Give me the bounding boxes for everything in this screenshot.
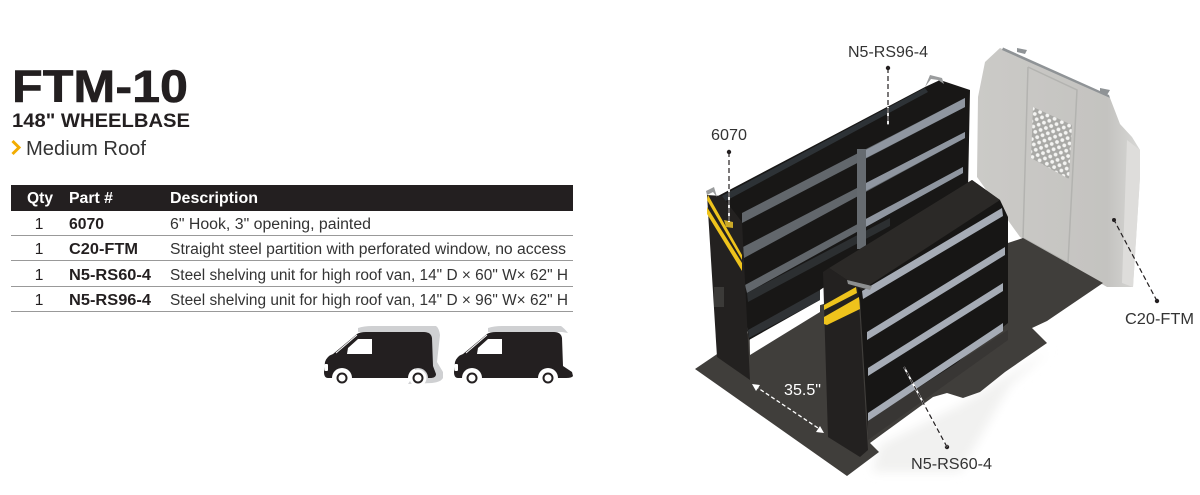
yellow safety stripes bbox=[707, 195, 742, 260]
row: N5-RS96-4 bbox=[11, 292, 573, 312]
vertical post bbox=[857, 149, 866, 249]
row: C20-FTM: Straight steel partition with perforated window, no access bbox=[170, 241, 566, 258]
wheelbase subtitle: 148" WHEELBASE bbox=[12, 110, 190, 132]
end upright bbox=[707, 195, 750, 380]
table header: Description bbox=[170, 190, 258, 207]
callout: 6070 bbox=[711, 127, 747, 222]
row: N5-RS60-4 bbox=[11, 267, 573, 287]
table header bbox=[11, 185, 573, 211]
callout: N5-RS60-4 bbox=[904, 367, 992, 473]
row: 6070: 1 bbox=[35, 216, 43, 233]
shelving unit N5-RS60-4 bbox=[823, 180, 1008, 457]
shelves bbox=[742, 98, 965, 293]
hook bbox=[847, 280, 872, 290]
table header: Qty bbox=[27, 190, 53, 207]
row: 6070: 6070 bbox=[69, 216, 104, 233]
row: N5-RS60-4: Steel shelving unit for high roof van, 14" D × 60" W× 62" H bbox=[170, 267, 568, 284]
callout: C20-FTM bbox=[1112, 218, 1194, 328]
perforated window bbox=[1031, 107, 1072, 179]
callout: 6070: 6070 bbox=[711, 127, 747, 144]
row: C20-FTM bbox=[11, 241, 573, 261]
floor shadow bbox=[872, 350, 1050, 472]
top hooks bbox=[706, 75, 944, 197]
row: C20-FTM: C20-FTM bbox=[69, 241, 138, 258]
end upright bbox=[823, 268, 868, 457]
callout: N5-RS96-4 bbox=[848, 44, 928, 125]
icon: chevron bbox=[12, 141, 19, 154]
table header: Part # bbox=[69, 190, 113, 207]
callout: N5-RS96-4: N5-RS96-4 bbox=[848, 44, 928, 61]
mounting brackets bbox=[1017, 48, 1110, 95]
icon: van, high roof bbox=[454, 326, 573, 385]
row: N5-RS60-4: N5-RS60-4 bbox=[69, 267, 151, 284]
row: 6070: 6" Hook, 3" opening, painted bbox=[170, 216, 371, 233]
title: FTM-10 bbox=[12, 61, 188, 112]
callout: C20-FTM: C20-FTM bbox=[1125, 311, 1194, 328]
van interior illustration bbox=[695, 48, 1140, 476]
hook 6070 bbox=[724, 220, 733, 228]
yellow safety stripes bbox=[824, 287, 857, 310]
white gap under rear shelving bbox=[749, 270, 820, 355]
row: C20-FTM: 1 bbox=[35, 241, 43, 258]
row: N5-RS96-4: N5-RS96-4 bbox=[69, 292, 151, 309]
van floor bbox=[695, 238, 1103, 476]
roof height line: Medium Roof bbox=[26, 138, 146, 160]
row: N5-RS60-4: 1 bbox=[35, 267, 43, 284]
partition wall C20-FTM bbox=[977, 48, 1140, 287]
upright cut-out bbox=[714, 287, 724, 307]
dimension: 35.5 inch aisle: 35.5" bbox=[784, 382, 821, 399]
icon: van, medium roof bbox=[324, 326, 443, 385]
row: N5-RS96-4: Steel shelving unit for high roof van, 14" D × 96" W× 62" H bbox=[170, 292, 568, 309]
parts table bbox=[11, 185, 573, 312]
shelving unit N5-RS96-4 bbox=[706, 75, 970, 380]
dimension: 35.5 inch aisle bbox=[752, 382, 824, 433]
shelves bbox=[862, 208, 1005, 421]
row: N5-RS96-4: 1 bbox=[35, 292, 43, 309]
callout: N5-RS60-4: N5-RS60-4 bbox=[911, 456, 992, 473]
row: 6070 bbox=[11, 216, 573, 236]
